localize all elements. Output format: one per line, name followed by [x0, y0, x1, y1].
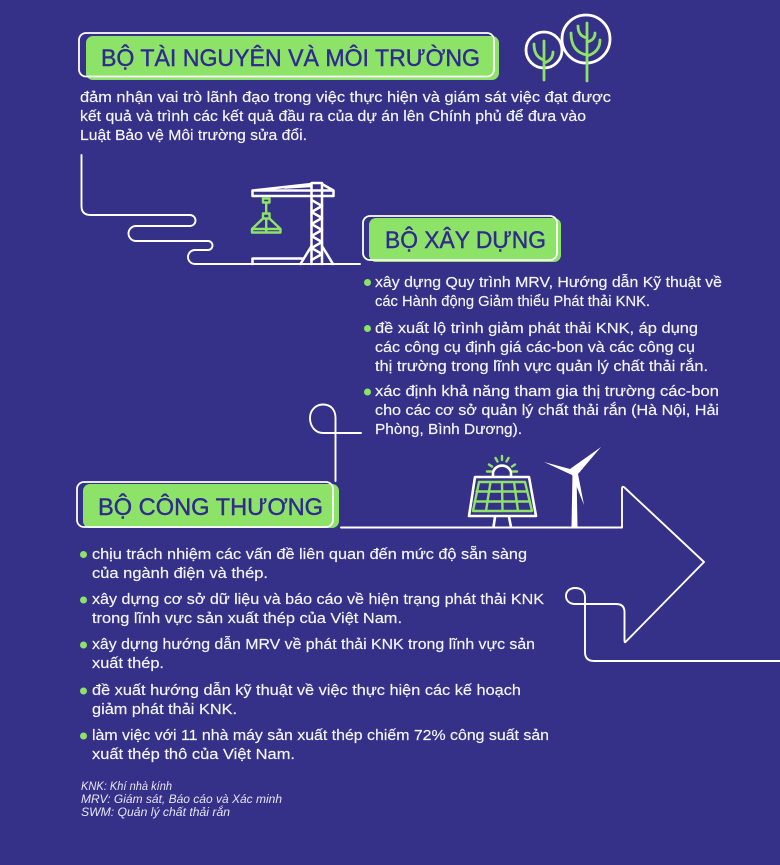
bullet item: readiness: [80, 546, 527, 582]
bullet item: steel plants: [80, 727, 549, 763]
bullet item: MRV process: các Hành động Giảm thiểu Phát thải KNK.: [375, 293, 650, 310]
heading: Bộ Xây dựng: [363, 216, 561, 262]
heading: Bộ Tài nguyên và Môi trường: BỘ TÀI NGUYÊN VÀ MÔI TRƯỜNG: [101, 44, 480, 72]
bullet item: technical guidance: [80, 682, 521, 718]
bullet item: MRV guidance: xuất thép.: [92, 655, 164, 672]
bullet item: readiness: của ngành điện và thép.: [92, 565, 268, 582]
bullet item: emission roadmap: các công cụ định giá các-bon và các công cụ: [375, 339, 695, 356]
bullet item: emission roadmap: thị trường trong lĩnh vực quản lý chất thải rắn.: [375, 358, 708, 375]
icon: crane: [252, 183, 334, 264]
icon: solar panel: [469, 456, 536, 527]
bullet item: database: [80, 591, 544, 627]
bullet item: readiness: chịu trách nhiệm các vấn đề liên quan đến mức độ sẵn sàng: [92, 546, 527, 563]
icon: wind turbine: [544, 447, 601, 527]
intro paragraph: Luật Bảo vệ Môi trường sửa đổi.: [80, 127, 307, 144]
arrow outline with trailing line: [341, 487, 780, 661]
bullet item: MRV process: xây dựng Quy trình MRV, Hướng dẫn Kỹ thuật về: [375, 274, 722, 291]
intro paragraph: [80, 89, 611, 144]
connector loop: list to Bộ Công Thương: [310, 404, 361, 481]
heading: Bộ Xây dựng: BỘ XÂY DỰNG: [385, 226, 546, 254]
footnotes: abbreviations: MRV: Giám sát, Báo cáo và Xác minh: [81, 792, 282, 806]
heading: Bộ Công Thương: [77, 482, 339, 528]
bullet item: MRV guidance: [80, 636, 535, 672]
bullet item: technical guidance: đề xuất hướng dẫn kỹ thuật về việc thực hiện các kế hoạch: [92, 682, 521, 699]
list: Bộ Xây dựng tasks: [364, 274, 722, 438]
icon: trees: [526, 15, 610, 81]
bullet item: database: trong lĩnh vực sản xuất thép của Việt Nam.: [92, 610, 402, 627]
bullet item: MRV guidance: xây dựng hướng dẫn MRV về phát thải KNK trong lĩnh vực sản: [92, 636, 535, 653]
footnotes: abbreviations: SWM: Quản lý chất thải rắn: [81, 804, 230, 819]
bullet item: carbon market: Phòng, Bình Dương).: [375, 421, 522, 438]
intro paragraph: đảm nhận vai trò lãnh đạo trong việc thực hiện và giám sát việc đạt được: [80, 89, 611, 106]
bullet item: MRV process: [364, 274, 722, 310]
bullet item: carbon market: cho các cơ sở quản lý chất thải rắn (Hà Nội, Hải: [375, 402, 719, 419]
connector line: top section to crane: [82, 155, 360, 264]
bullet item: carbon market: xác định khả năng tham gia thị trường các-bon: [375, 383, 719, 400]
bullet item: technical guidance: giảm phát thải KNK.: [92, 701, 237, 718]
list: Bộ Công Thương tasks: [80, 546, 549, 763]
bullet item: emission roadmap: đề xuất lộ trình giảm phát thải KNK, áp dụng: [375, 320, 698, 337]
bullet item: carbon market: [364, 383, 719, 438]
heading: Bộ Tài nguyên và Môi trường: [79, 33, 499, 80]
footnotes: abbreviations: [81, 779, 282, 819]
bullet item: steel plants: làm việc với 11 nhà máy sản xuất thép chiếm 72% công suất sản: [92, 727, 549, 744]
heading: Bộ Công Thương: BỘ CÔNG THƯƠNG: [98, 493, 323, 521]
bullet item: steel plants: xuất thép thô của Việt Nam.: [92, 746, 295, 763]
bullet item: emission roadmap: [364, 320, 708, 375]
footnotes: abbreviations: KNK: Khí nhà kính: [81, 779, 172, 793]
bullet item: database: xây dựng cơ sở dữ liệu và báo cáo về hiện trạng phát thải KNK: [92, 591, 544, 608]
intro paragraph: kết quả và trình các kết quả đầu ra của dự án lên Chính phủ để đưa vào: [80, 108, 586, 125]
